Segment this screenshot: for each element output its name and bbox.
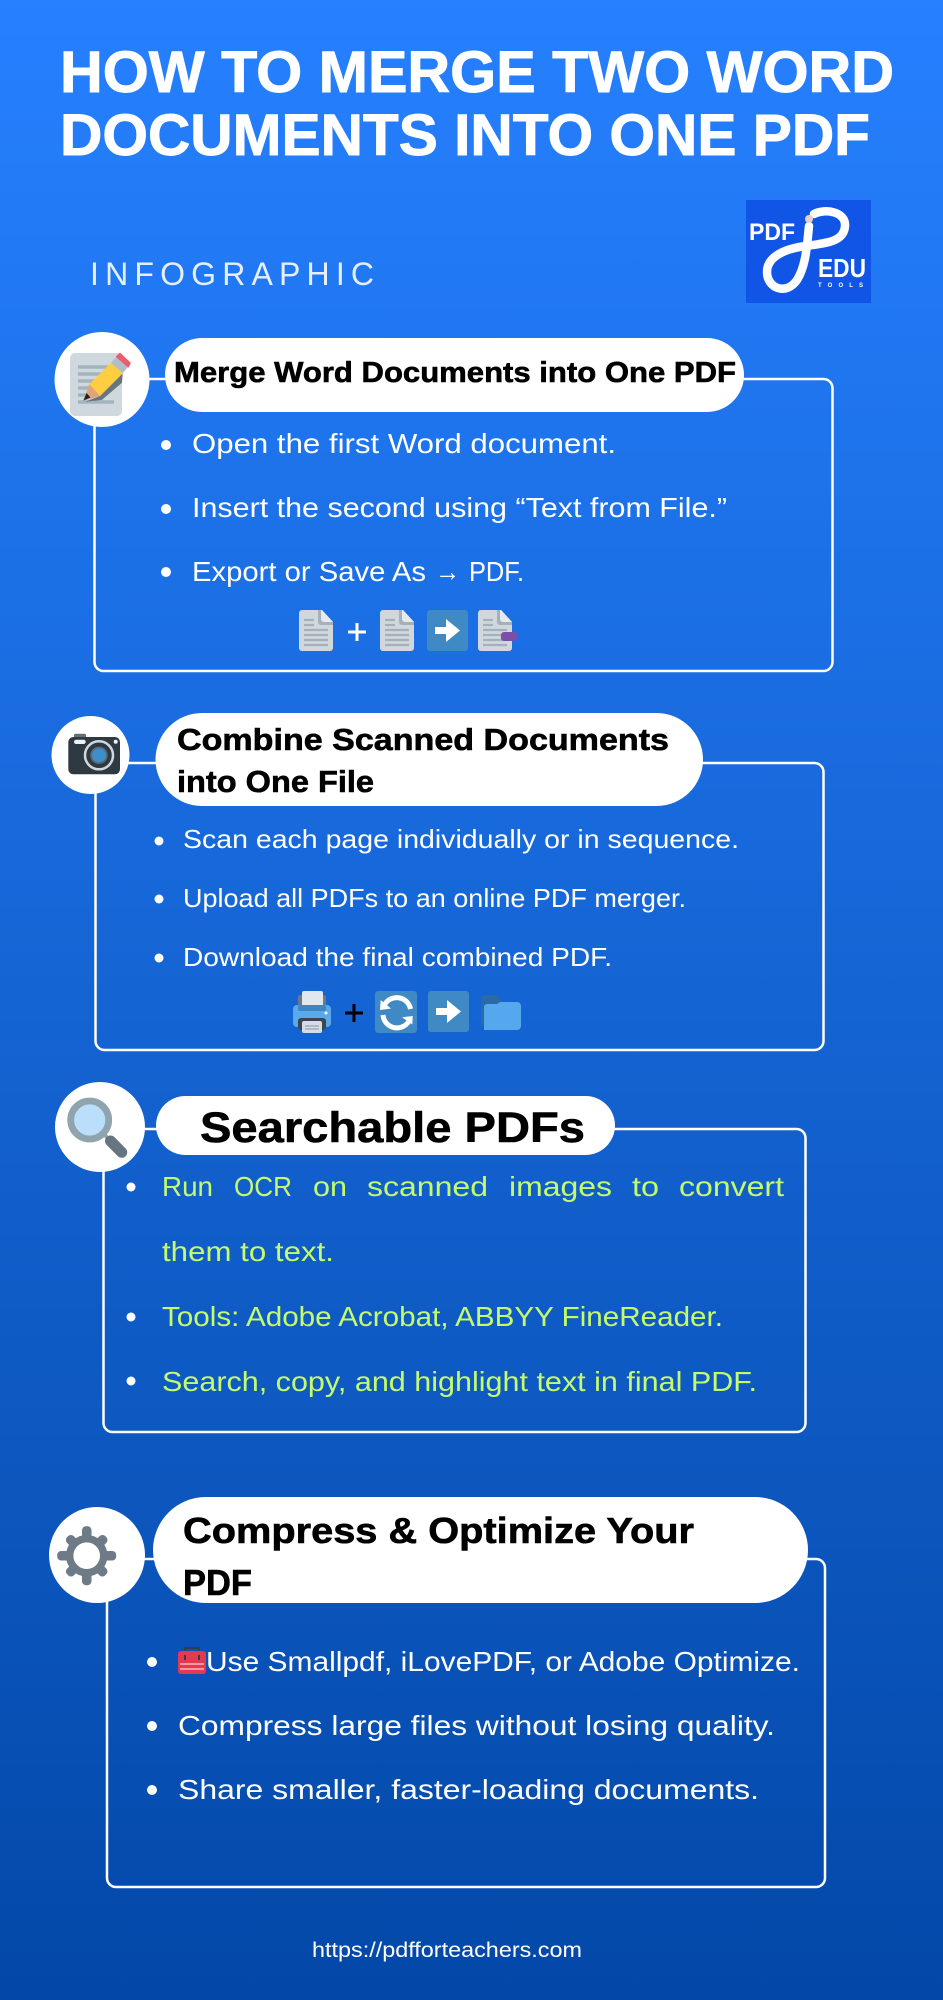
logo: EDU: [818, 253, 866, 283]
subtitle: infographic: INFOGRAPHIC: [90, 256, 374, 292]
bullet list: convert: [679, 1171, 784, 1202]
bullet list: OCR: [234, 1171, 292, 1202]
bullet list: to: [632, 1171, 659, 1202]
icon row: print plus sync to folder: [293, 991, 521, 1033]
bullet list: Open the first Word document.: [192, 428, 616, 459]
logo: TOOLS: [818, 283, 863, 289]
panel: merge word documents: [54, 332, 832, 671]
bullet list: Upload all PDFs to an online PDF merger.: [183, 883, 686, 913]
panel frame: [94, 379, 832, 671]
heading pill: [156, 1096, 615, 1155]
icon row: doc plus doc to pdf: [299, 610, 517, 651]
heading pill: Searchable PDFs: [200, 1104, 585, 1152]
bullet list: images: [509, 1171, 612, 1202]
logo: [746, 200, 871, 303]
heading pill: [165, 338, 744, 412]
icon: camera: [52, 716, 130, 794]
panel: searchable pdfs: [55, 1082, 806, 1432]
heading pill: [156, 713, 703, 806]
heading pill: Combine Scanned Documents: [177, 722, 669, 757]
heading pill: PDF: [183, 1562, 252, 1603]
bullet list: [147, 1646, 800, 1805]
bullet list: on: [313, 1171, 347, 1202]
bullet list: Use Smallpdf, iLovePDF, or Adobe Optimize.: [206, 1646, 800, 1677]
bullet list: them to text.: [162, 1236, 334, 1267]
bullet list: [154, 824, 739, 972]
logo: PDF: [749, 219, 795, 246]
panel frame: [104, 1129, 806, 1432]
title: [60, 40, 894, 168]
heading pill: into One File: [177, 764, 374, 799]
bullet list: Search, copy, and highlight text in final PDF.: [162, 1366, 757, 1397]
bullet list: Share smaller, faster-loading documents.: [178, 1774, 759, 1805]
bullet list: →: [435, 556, 460, 587]
bullet list: Insert the second using “Text from File.”: [192, 492, 727, 523]
title: HOW TO MERGE TWO WORD: [60, 40, 894, 105]
bullet list: scanned: [367, 1171, 488, 1202]
bullet list: Export or Save As: [192, 556, 426, 587]
bullet list: Scan each page individually or in sequence.: [183, 824, 739, 854]
panel: compress and optimize: [49, 1497, 825, 1887]
footer url: https://pdfforteachers.com: [312, 1939, 582, 1962]
bullet list: Run: [162, 1171, 213, 1202]
bullet list: [126, 1171, 784, 1397]
bullet list: Tools: Adobe Acrobat, ABBYY FineReader.: [162, 1301, 723, 1332]
heading pill: Compress & Optimize Your: [183, 1510, 694, 1551]
heading pill: [153, 1497, 808, 1603]
bullet list: Download the final combined PDF.: [183, 942, 612, 972]
heading pill: Merge Word Documents into One PDF: [174, 357, 736, 389]
panel frame: [107, 1559, 825, 1887]
title: DOCUMENTS INTO ONE PDF: [60, 103, 870, 168]
panel: combine scanned documents: [52, 713, 824, 1050]
icon: pencil and paper: [54, 332, 150, 427]
icon: gear: [49, 1507, 145, 1603]
icon: toolbox: [178, 1648, 206, 1674]
bullet list: Compress large files without losing quality.: [178, 1710, 775, 1741]
bullet list: PDF.: [469, 556, 524, 587]
panel frame: [96, 763, 824, 1050]
icon: magnifying glass: [55, 1082, 145, 1172]
bullet list: [161, 428, 727, 587]
